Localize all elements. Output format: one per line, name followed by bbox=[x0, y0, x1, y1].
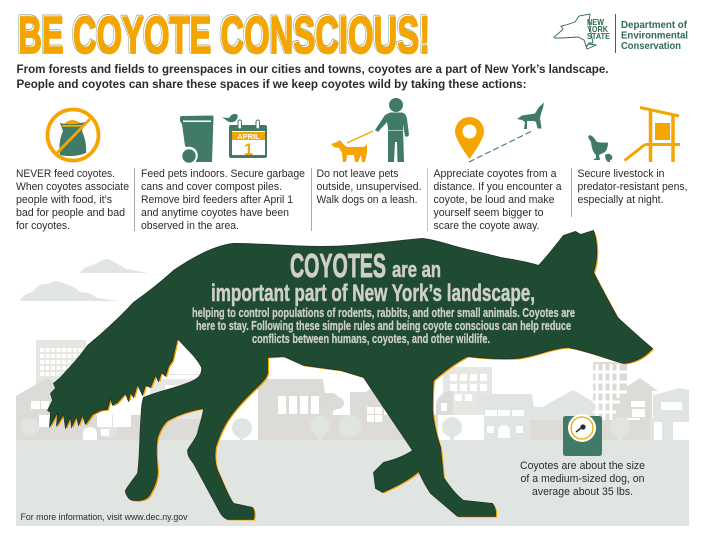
action text: appreciate from a distance: yourself seem bigger to bbox=[434, 207, 544, 219]
footer link text: For more information, visit www.dec.ny.gov bbox=[20, 512, 188, 523]
icon: bird on calendar bbox=[222, 114, 267, 159]
action text: feed pets indoors: Remove bird feeders after April 1 bbox=[141, 194, 293, 206]
intro text bbox=[16, 62, 608, 91]
action text: pets outside bbox=[316, 168, 422, 206]
action text: feed pets indoors: cans and cover compost piles. bbox=[141, 181, 282, 193]
icon: distance pin and coyote bbox=[455, 102, 544, 162]
action text: never feed bbox=[16, 168, 129, 232]
buildings, light bbox=[21, 388, 689, 440]
action text: appreciate from a distance: scare the coyote away. bbox=[434, 220, 540, 232]
icon: bird on calendar: 1 bbox=[244, 140, 253, 159]
intro text: From forests and fields to greenspaces in our cities and towns, coyotes are a part of New York’s landscape. bbox=[16, 62, 608, 76]
action text: never feed: bad for people and bad bbox=[16, 207, 125, 219]
coyote silhouette bbox=[49, 232, 654, 520]
logo: NYS DEC: NEW bbox=[587, 18, 604, 27]
action text: never feed: for coyotes. bbox=[16, 220, 70, 232]
icon: bird on calendar: APRIL bbox=[237, 132, 260, 141]
building windows bbox=[31, 374, 689, 440]
icon: dog on leash with person bbox=[331, 98, 409, 162]
size caption bbox=[520, 460, 645, 498]
title: BE COYOTE CONSCIOUS! bbox=[17, 6, 429, 64]
coyote heading text: are an bbox=[392, 257, 441, 282]
action text: appreciate from a distance: Appreciate coyotes from a bbox=[434, 168, 557, 180]
buildings behind coyote, tan bbox=[16, 362, 682, 440]
action text: feed pets indoors bbox=[141, 168, 305, 232]
logo: NYS DEC: STATE bbox=[587, 32, 610, 41]
left tall building bbox=[36, 340, 86, 410]
tree bbox=[322, 393, 344, 417]
size caption: Coyotes are about the size bbox=[520, 460, 645, 472]
size caption: of a medium-sized dog, on bbox=[520, 473, 644, 485]
action text: appreciate from a distance: coyote, be loud and make bbox=[434, 194, 554, 206]
action text: pets outside: Do not leave pets bbox=[316, 168, 399, 180]
icon: no feeding bbox=[48, 110, 98, 160]
title bbox=[17, 6, 430, 65]
intro text: People and coyotes can share these spaces if we keep coyotes wild by taking these actions: bbox=[16, 77, 526, 91]
coyote heading text: COYOTES bbox=[290, 247, 386, 284]
action text: secure livestock: predator-resistant pens, bbox=[578, 181, 688, 193]
tall building right windows bbox=[593, 364, 627, 420]
action text: never feed: people with food, it’s bbox=[16, 194, 112, 206]
action text: pets outside: outside, unsupervised. bbox=[316, 181, 422, 193]
logo: NYS DEC bbox=[554, 14, 688, 53]
coyote heading text bbox=[192, 247, 575, 346]
action text: feed pets indoors: observed in the area. bbox=[141, 220, 239, 232]
size caption: average about 35 lbs. bbox=[532, 486, 633, 498]
logo: NYS DEC: Environmental bbox=[621, 30, 688, 42]
coyote heading text: conflicts between humans, coyotes, and other wildlife. bbox=[252, 331, 490, 346]
action text: feed pets indoors: Feed pets indoors. Secure garbage bbox=[141, 168, 305, 180]
action text: secure livestock: especially at night. bbox=[578, 194, 664, 206]
logo: NYS DEC: YORK bbox=[587, 25, 608, 34]
logo: NYS DEC: Department of bbox=[621, 20, 688, 31]
action text: never feed: NEVER feed coyotes. bbox=[16, 168, 115, 180]
action text: appreciate from a distance bbox=[434, 168, 562, 232]
title: BE COYOTE CONSCIOUS! bbox=[17, 6, 429, 64]
action text: secure livestock bbox=[578, 168, 688, 206]
logo: NYS DEC: Conservation bbox=[621, 41, 681, 52]
icon: weight scale bbox=[563, 414, 602, 456]
icon: hen and chick with coop bbox=[588, 108, 680, 162]
skyline and ground bbox=[16, 340, 689, 526]
coyote dark edge bbox=[48, 230, 652, 519]
action text: pets outside: Walk dogs on a leash. bbox=[316, 194, 418, 206]
action text: feed pets indoors: and anytime coyotes have been bbox=[141, 207, 289, 219]
icon: garbage can bbox=[180, 116, 214, 164]
coyote heading text: important part of New York’s landscape, bbox=[211, 280, 535, 307]
title: BE COYOTE CONSCIOUS! bbox=[18, 7, 430, 65]
action text: appreciate from a distance: distance. If you encounter a bbox=[434, 181, 562, 193]
clouds bbox=[20, 259, 148, 301]
action text: never feed: When coyotes associate bbox=[16, 181, 129, 193]
action text: secure livestock: Secure livestock in bbox=[578, 168, 664, 180]
